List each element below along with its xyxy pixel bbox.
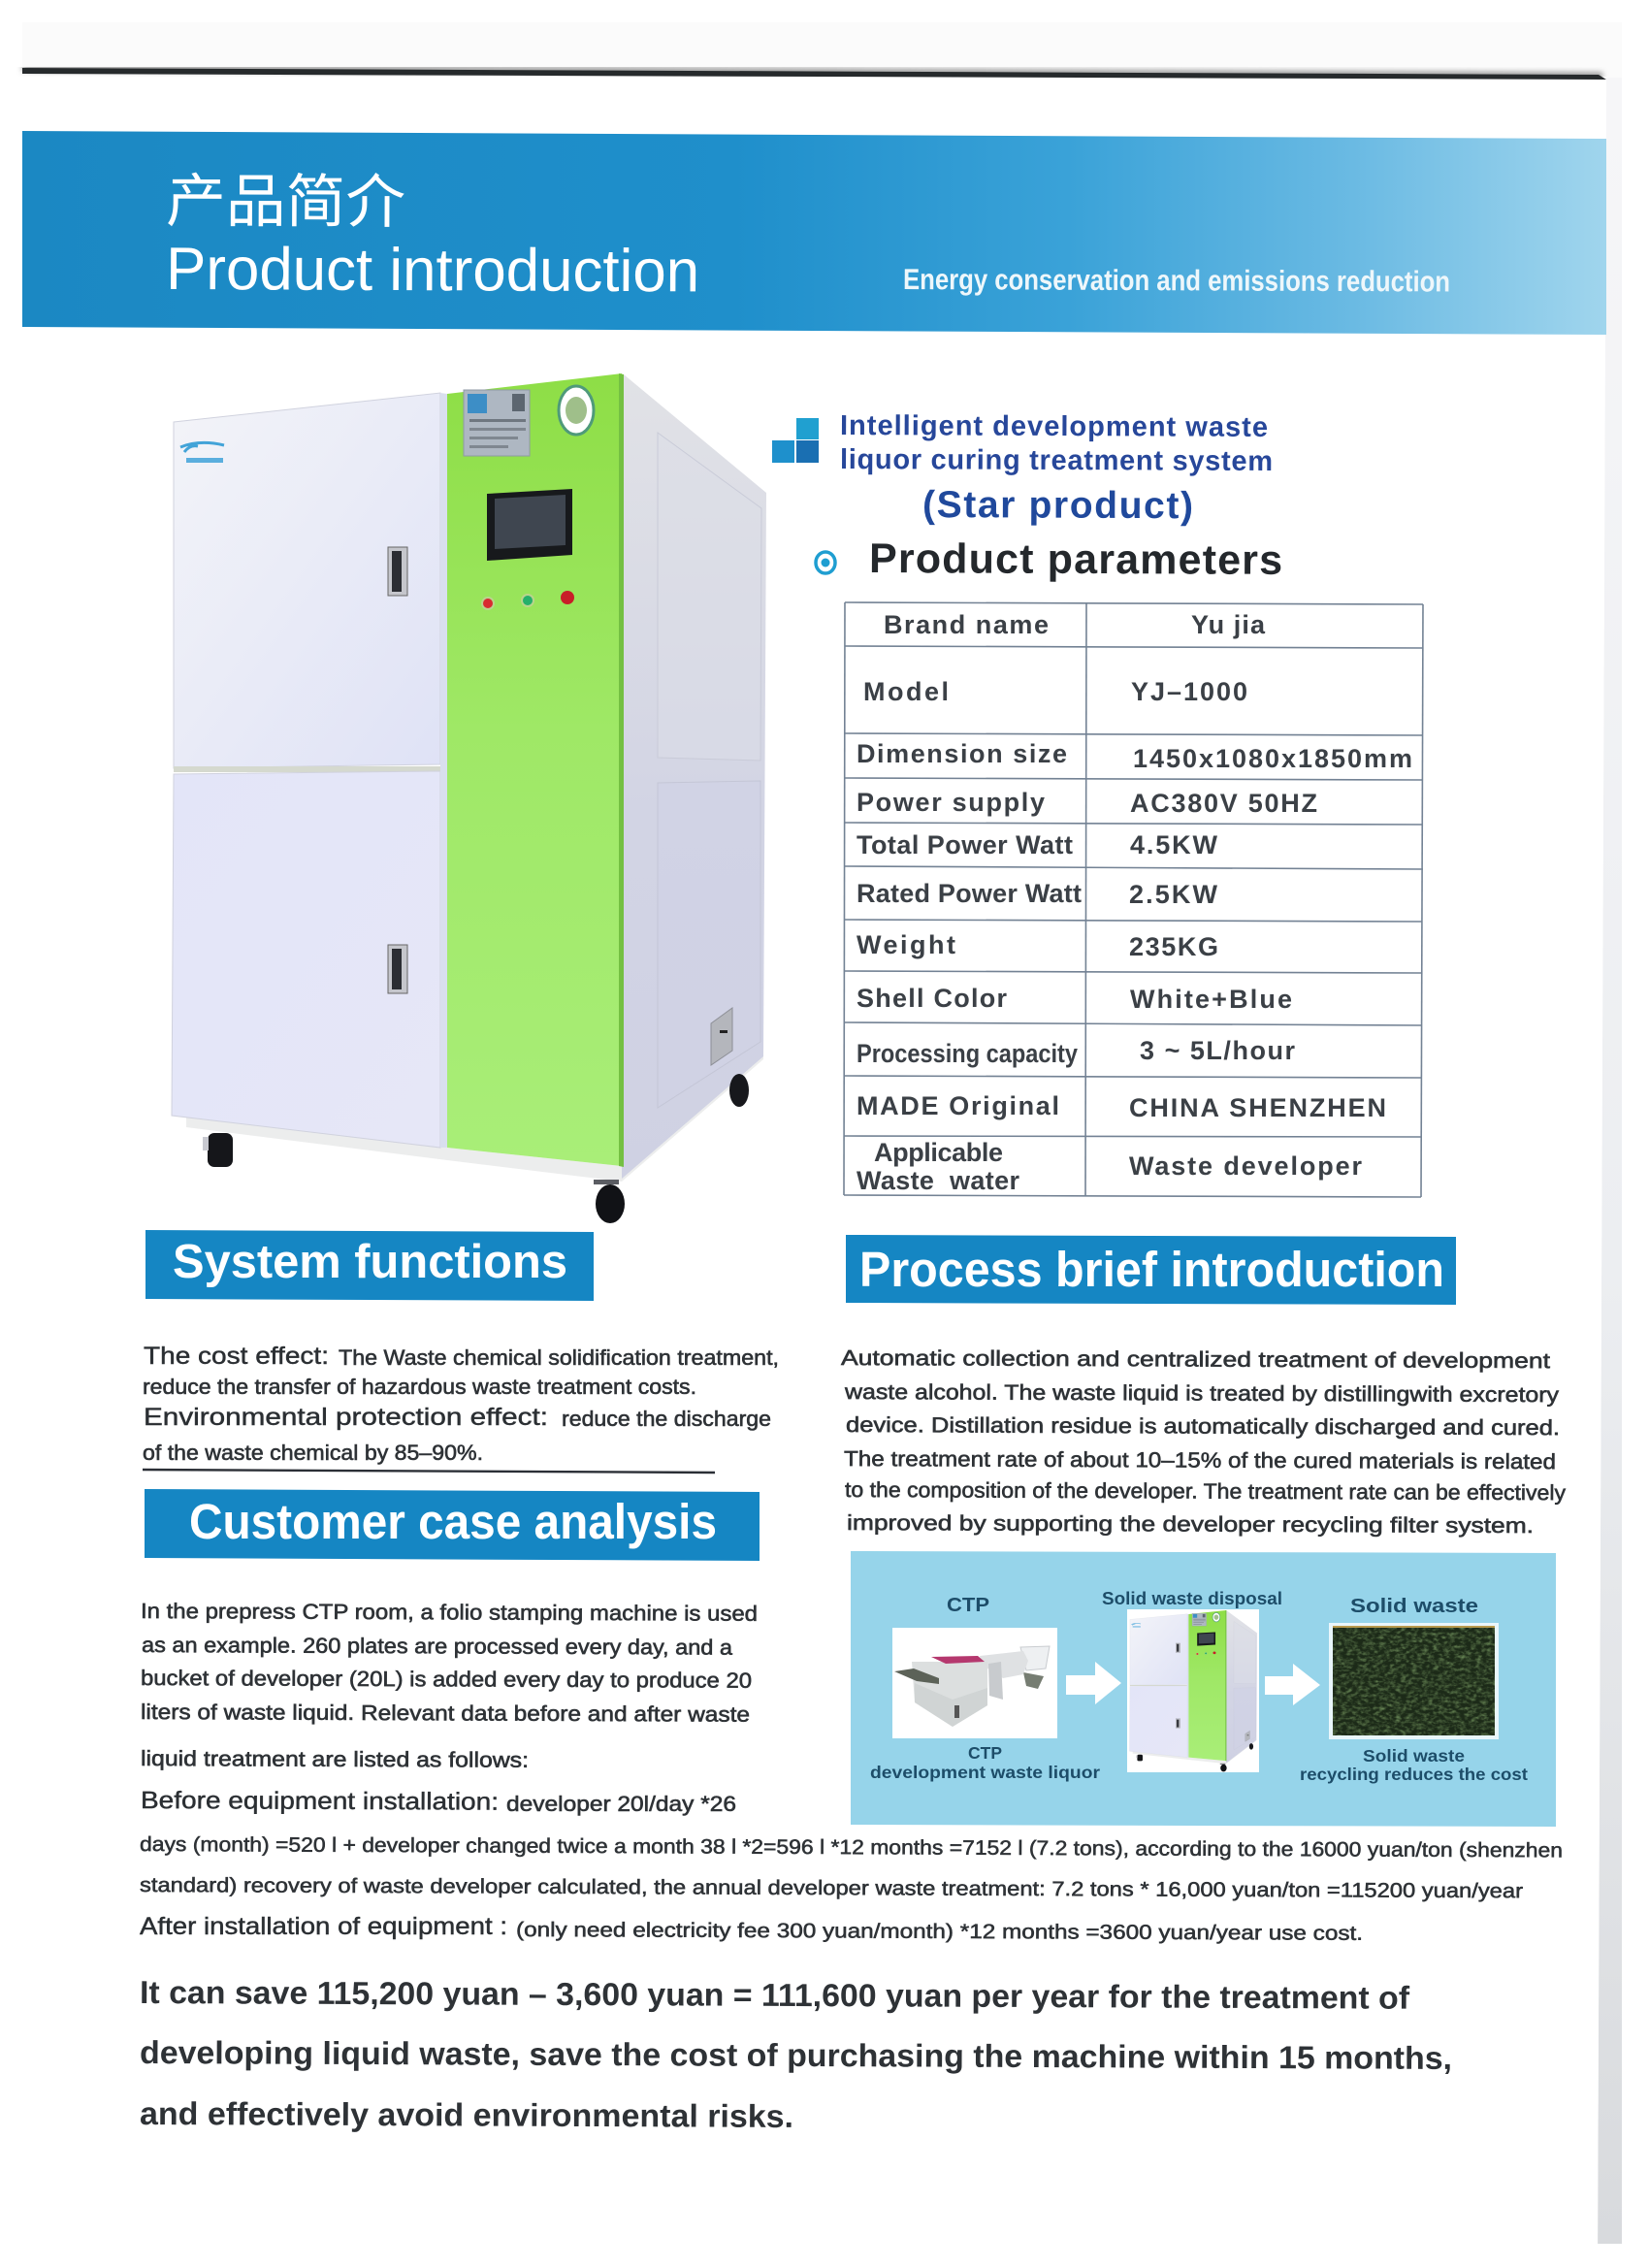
customer case text: as an example. 260 plates are processed every day, and a — [142, 1633, 733, 1660]
row: applicable waste water: Waste developer — [1129, 1151, 1362, 1181]
system functions text: reduce the discharge — [562, 1407, 771, 1431]
customer case text: days (month) =520 l + developer changed twice a month 38 l *2=596 l *12 months =7152 l (7.2 tons), according to the 16000 yuan/ton (shenzhen — [140, 1833, 1563, 1862]
process description text: waste alcohol. The waste liquid is treated by distillingwith excretory — [844, 1379, 1559, 1407]
header banner — [22, 131, 1606, 335]
process description text: to the composition of the developer. The treatment rate can be effectively — [845, 1477, 1566, 1505]
arrow: disposal to solid waste — [1265, 1664, 1320, 1705]
system functions text: The cost effect: — [144, 1343, 329, 1370]
row: rated power watt: Rated Power Watt — [857, 879, 1082, 908]
caption: CTP waste liquor: CTP — [968, 1743, 1002, 1763]
row: weight — [857, 930, 1218, 961]
customer case text: Before equipment installation: — [141, 1787, 499, 1816]
banner title: English: Product introduction — [166, 236, 699, 305]
row: power supply: Power supply — [857, 788, 1045, 817]
row: brand name — [884, 610, 1266, 639]
process description text: The treatment rate of about 10–15% of the cured materials is related — [844, 1446, 1556, 1474]
row: dimension size: 1450x1080x1850mm — [1133, 744, 1412, 773]
customer case text: liquid treatment are listed as follows: — [141, 1746, 529, 1772]
row: weight: Weight — [857, 930, 955, 959]
section heading: process brief introduction: Process brief introduction — [859, 1242, 1444, 1297]
label: solid waste disposal: Solid waste disposal — [1102, 1589, 1282, 1608]
savings conclusion text — [140, 1974, 1452, 2134]
caption: solid waste recycling: recycling reduces the cost — [1300, 1765, 1528, 1784]
savings conclusion text: developing liquid waste, save the cost of purchasing the machine within 15 months, — [140, 2034, 1452, 2076]
row: rated power watt: 2.5KW — [1129, 880, 1218, 909]
row: processing capacity: 3 ~ 5L/hour — [1140, 1036, 1295, 1065]
process description text: Automatic collection and centralized treatment of development — [841, 1345, 1550, 1373]
row: brand name: Yu jia — [1191, 610, 1266, 639]
system functions text: reduce the transfer of hazardous waste treatment costs. — [143, 1375, 696, 1399]
row: made original — [857, 1091, 1386, 1122]
product parameters heading: Product parameters — [869, 535, 1282, 584]
row: applicable waste water: Waste water — [857, 1166, 1019, 1195]
row: total power watt: 4.5KW — [1130, 830, 1218, 859]
row: processing capacity: Processing capacity — [857, 1039, 1078, 1068]
product photo: curing treatment cabinet — [172, 373, 766, 1223]
section heading: system functions: System functions — [173, 1236, 567, 1288]
row: shell color: Shell Color — [857, 984, 1007, 1013]
photo: solid waste — [1329, 1623, 1499, 1739]
row: made original: CHINA SHENZHEN — [1129, 1093, 1386, 1122]
row: total power watt: Total Power Watt — [857, 830, 1073, 859]
process flow diagram panel — [851, 1551, 1556, 1827]
blue squares icon — [772, 418, 819, 463]
process description text — [841, 1345, 1566, 1538]
star product subheading: (Star product) — [922, 484, 1193, 527]
system functions text: The Waste chemical solidification treatment, — [339, 1345, 779, 1370]
product name heading: Intelligent development waste — [840, 410, 1268, 443]
row: model — [863, 677, 1247, 706]
product name heading — [840, 410, 1273, 477]
system functions text — [143, 1343, 779, 1465]
savings conclusion text: It can save 115,200 yuan – 3,600 yuan = 111,600 yuan per year for the treatment of — [140, 1974, 1410, 2016]
row: shell color — [857, 984, 1292, 1014]
row: applicable waste water: Applicable — [874, 1138, 1003, 1167]
page top edge shadow line — [22, 68, 1606, 80]
customer case text: developer 20l/day *26 — [506, 1792, 736, 1816]
row: applicable waste water — [857, 1138, 1362, 1195]
savings conclusion text: and effectively avoid environmental risks. — [140, 2095, 793, 2134]
caption: solid waste recycling: Solid waste — [1363, 1746, 1465, 1766]
row: power supply — [857, 788, 1317, 818]
row: dimension size — [857, 739, 1412, 773]
customer case text: liters of waste liquid. Relevant data before and after waste — [141, 1700, 750, 1727]
process description text: device. Distillation residue is automatically discharged and cured. — [846, 1412, 1560, 1440]
thumbnail: disposal cabinet — [1127, 1609, 1259, 1772]
customer case text — [140, 1599, 1563, 1945]
customer case text: After installation of equipment : — [140, 1913, 507, 1940]
customer case text: standard) recovery of waste developer calculated, the annual developer waste treatment: 7.2 tons * 16,000 yuan/ton =115200 yuan/year — [140, 1874, 1523, 1902]
row: total power watt — [857, 830, 1218, 859]
row: shell color: White+Blue — [1130, 985, 1292, 1014]
customer case text: (only need electricity fee 300 yuan/month) *12 months =3600 yuan/year use cost. — [516, 1919, 1363, 1945]
product name heading: liquor curing treatment system — [840, 444, 1273, 477]
row: power supply: AC380V 50HZ — [1130, 789, 1317, 818]
caption: CTP waste liquor: development waste liquor — [870, 1763, 1100, 1782]
process description text: improved by supporting the developer recycling filter system. — [847, 1510, 1534, 1538]
row: brand name: Brand name — [884, 610, 1049, 639]
photo: CTP machine — [892, 1628, 1057, 1738]
system functions text: of the waste chemical by 85–90%. — [143, 1441, 483, 1465]
row: weight: 235KG — [1129, 932, 1218, 961]
label: solid waste: Solid waste — [1350, 1596, 1478, 1617]
label: CTP: CTP — [947, 1595, 989, 1616]
system functions text: Environmental protection effect: — [144, 1404, 548, 1431]
customer case text: In the prepress CTP room, a folio stamping machine is used — [141, 1599, 758, 1626]
banner tagline: Energy conservation and emissions reduction — [903, 264, 1450, 298]
row: made original: MADE Original — [857, 1091, 1059, 1120]
caption: solid waste recycling — [1300, 1746, 1528, 1784]
customer case text: bucket of developer (20L) is added every day to produce 20 — [141, 1666, 752, 1693]
section heading: system functions — [146, 1230, 594, 1301]
row: model: Model — [863, 677, 949, 706]
icon: target bullet — [816, 552, 835, 573]
caption: CTP waste liquor — [870, 1743, 1100, 1782]
banner title: Chinese: 产品简介 — [166, 154, 405, 240]
row: model: YJ–1000 — [1131, 677, 1247, 706]
arrow: CTP to disposal — [1066, 1662, 1121, 1704]
row: dimension size: Dimension size — [857, 739, 1067, 768]
parameter table — [844, 602, 1423, 1197]
section heading: customer case analysis: Customer case analysis — [189, 1494, 717, 1549]
row: rated power watt — [857, 879, 1218, 909]
row: processing capacity — [857, 1036, 1295, 1068]
